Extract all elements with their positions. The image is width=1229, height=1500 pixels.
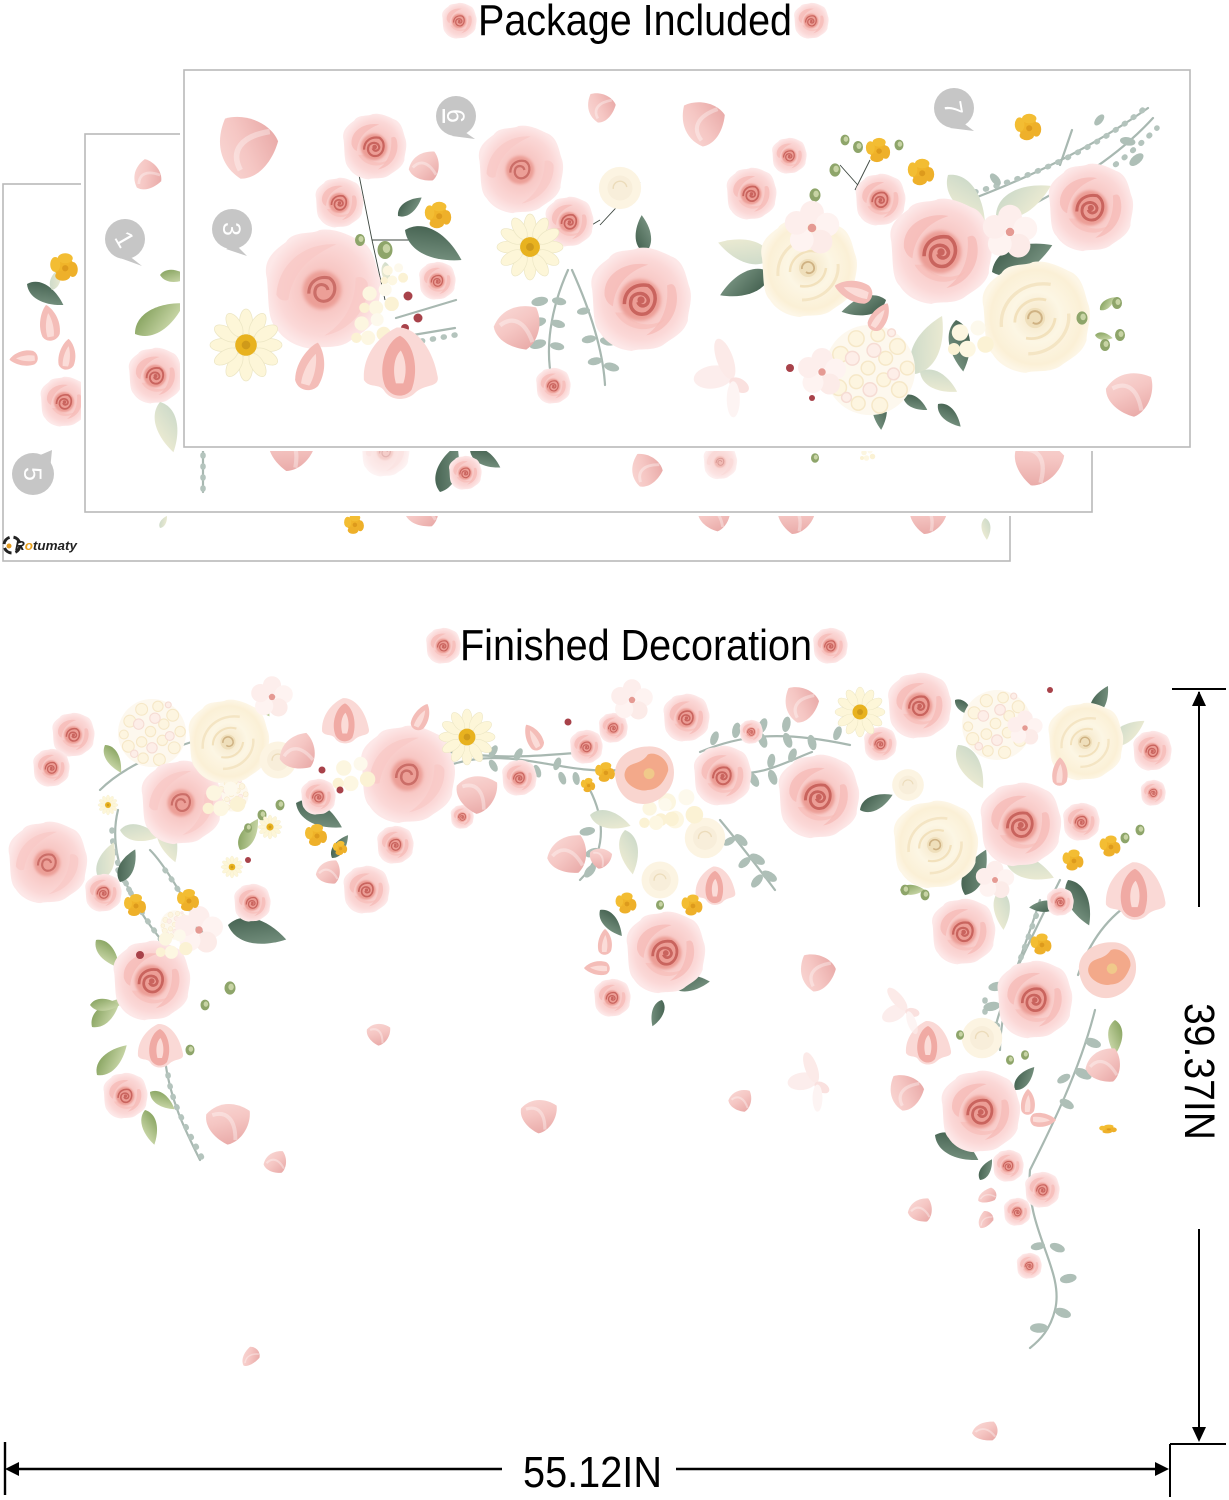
leaves [86,683,1149,1182]
badges 3 6 7 [212,88,974,256]
vines [100,735,1135,1348]
grey vine leaflets [529,113,1146,373]
panel: sticker sheet front [180,66,1194,451]
title: Package Included [442,0,829,45]
icon: left rose [426,628,461,664]
width label: 55.12IN [523,1448,662,1497]
dimension: height 39.37IN [1170,689,1226,1497]
yellow blossoms [425,114,1041,228]
grey vine leaflets [487,716,1102,1333]
sheet back visible florals bottom [159,516,990,540]
badge: number 5: 5 [18,467,46,481]
heading text: Finished Decoration: Finished Decoration [460,621,812,670]
tulips and buds [138,698,1165,1127]
hydrangea [825,325,915,415]
small blossoms, buds and berries [136,676,1144,1065]
tulip and daisies [210,214,563,399]
title: Finished Decoration [426,621,848,670]
badges 3 6 7: 6 [441,109,469,123]
roses [9,673,1172,1279]
badges 3 6 7: 3 [217,222,245,236]
chart: finished floral arrangement [9,673,1172,1440]
dimension: width 55.12IN [5,1442,1169,1497]
butterflies [786,979,928,1112]
petals [198,683,1120,1440]
small blossoms and buds [351,135,1125,401]
badge: number 1 [105,219,145,266]
petals [207,90,1157,420]
daisies [98,687,885,878]
sheet middle visible florals bottom [200,451,1064,494]
badges 3 6 7: 7 [938,99,968,117]
logo: Rotumaty: Rotumaty [15,538,78,553]
badge: number 1: 1 [109,226,140,253]
badge: number 5 [12,450,54,495]
icon: left rose [442,3,477,39]
icon: right rose [813,628,848,664]
icon: right rose [794,3,829,39]
sheet middle visible florals left [128,159,180,452]
roses [266,114,1133,404]
hydrangeas [118,690,1032,940]
sheet back visible florals left [10,253,81,426]
panel: sticker sheet back [3,184,1010,561]
vines [395,104,1157,385]
leaves [381,167,1118,431]
orange blooms [615,746,1136,998]
height label: 39.37IN [1175,1003,1223,1140]
yellow blossoms [124,762,1120,1133]
panel: sticker sheet middle [81,130,1096,516]
butterfly [692,336,752,417]
stems [358,160,880,300]
